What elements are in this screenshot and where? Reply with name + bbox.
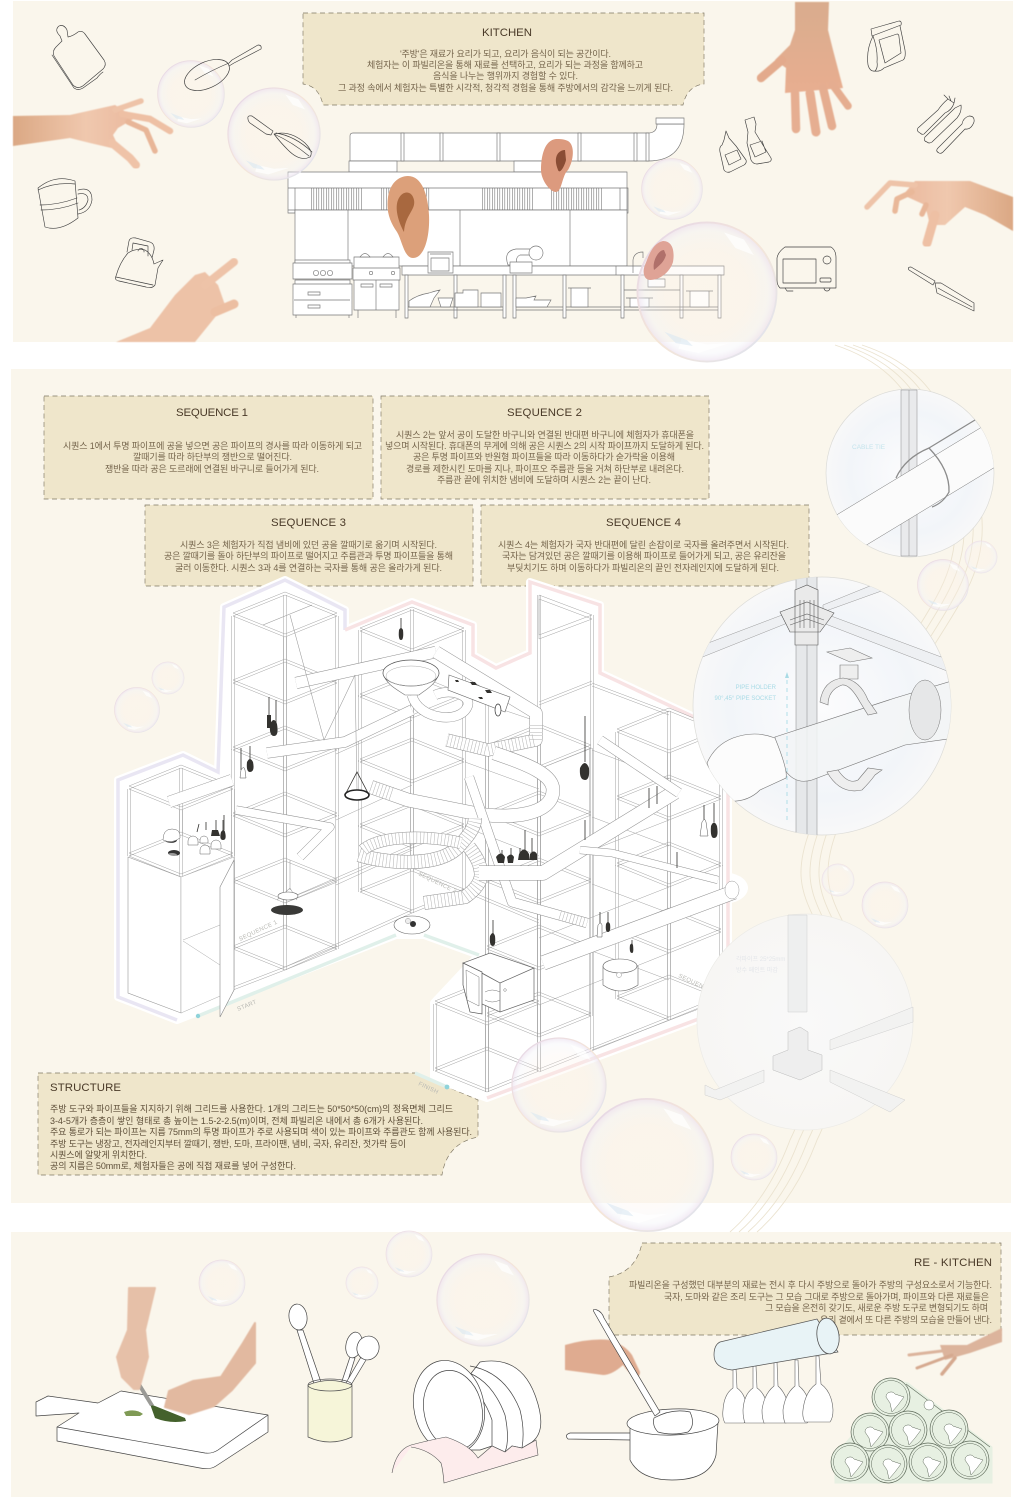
kitchen heading: KITCHEN <box>482 27 532 39</box>
body <box>385 429 704 485</box>
bubbles in sequence panel <box>114 541 997 1231</box>
pot handle <box>566 1433 632 1440</box>
corrugated ring <box>359 818 475 862</box>
heading: RE - KITCHEN <box>914 1257 992 1269</box>
pipe inner rings <box>834 1380 986 1480</box>
board edge <box>57 1415 268 1453</box>
bubbles in re-kitchen panel <box>199 1231 529 1346</box>
body: 시퀀스 2는 앞서 공이 도달한 바구니와 연결된 반대편 바구니에 체험자가 휴대폰을 <box>396 429 694 440</box>
utensil cup <box>287 1303 382 1442</box>
cabinet body <box>128 857 181 1013</box>
cucumber <box>150 1404 186 1422</box>
body: 시퀀스 1에서 투명 파이프에 공을 넣으면 공은 파이프의 경사를 따라 이동하게 되고 <box>63 440 362 451</box>
faucet <box>633 252 643 273</box>
post <box>901 390 917 556</box>
bubble <box>822 864 854 896</box>
panel: kitchen background <box>13 1 1013 342</box>
kitchen body: 그 과정 속에서 체험자는 특별한 시각적, 청각적 경험을 통해 주방에서의 감각을 느끼게 된다. <box>338 82 673 93</box>
body: 주름관 끝에 위치한 냄비에 도달하며 시퀀스 2는 끝이 난다. <box>437 474 651 485</box>
hand: left reach <box>13 101 170 165</box>
pipe <box>837 428 994 545</box>
plates <box>450 1361 541 1452</box>
upper long pipe <box>296 652 436 683</box>
hanging utensils <box>240 618 718 953</box>
ladle handle <box>593 1309 660 1416</box>
frame grid <box>128 592 722 1092</box>
body: 주방 도구와 파이프들을 지지하기 위해 그리드를 사용한다. 1개의 그리드는 50*50*50(cm)의 정육면체 그리드 <box>50 1103 453 1114</box>
pot rim <box>627 1407 719 1437</box>
pot <box>603 959 638 991</box>
hanging glasses <box>723 1356 833 1423</box>
icon: kettle <box>115 238 163 288</box>
icon: microwave <box>777 247 836 288</box>
bubble <box>437 1254 529 1346</box>
cabinet interior <box>181 857 234 1013</box>
diagonal outline <box>906 1384 990 1447</box>
plate lines <box>450 1366 523 1452</box>
socket <box>648 279 665 287</box>
kitchen text card <box>303 13 704 105</box>
lens: base joint <box>697 914 913 1130</box>
body: 시퀀스 3은 체험자가 직접 냄비에 있던 공을 깔때기로 옮기며 시작된다. <box>180 539 437 550</box>
hand: re-kitchen right <box>909 1328 1002 1374</box>
upper arm hand <box>117 1288 155 1389</box>
white silhouette <box>118 580 728 1098</box>
body: 주요 통로가 되는 파이프는 지름 75mm의 투명 파이프가 주로 사용되며 색이 있는 파이프와 주름관도 함께 사용된다. <box>50 1126 472 1137</box>
hand: right reach <box>867 181 1013 243</box>
stove knobs <box>163 815 226 857</box>
holder top <box>820 648 877 715</box>
long bottom right pipe <box>543 892 734 963</box>
pans and pots <box>409 288 713 307</box>
body: 주방 도구는 냉장고, 전자레인지부터 깔때기, 쟁반, 도마, 프라이팬, 냄비, 국자, 유리잔, 젓가락 등이 <box>50 1138 406 1149</box>
range <box>293 260 352 318</box>
body <box>498 539 789 573</box>
sequence 1 label: SEQUENCE 1 <box>238 920 279 943</box>
start label: START <box>237 1000 258 1013</box>
body: 시퀀스에 알맞게 위치한다. <box>50 1149 147 1160</box>
pink rack <box>392 1437 538 1483</box>
pipe end rim <box>725 881 739 899</box>
body: 쟁반을 따라 공은 도르래에 연결된 바구니로 들어가게 된다. <box>105 463 319 474</box>
spoon left <box>287 1303 323 1390</box>
faint labels: 각파이프 25*25mm <box>736 955 785 963</box>
sequence 3 label: SEQUENCE 3 <box>677 973 718 997</box>
beams <box>705 1007 913 1112</box>
kitchen body: 체험자는 이 파빌리온을 통해 재료를 선택하고, 요리가 되는 과정을 함께하고 <box>367 60 643 70</box>
icon: bottles <box>720 117 771 172</box>
green backing <box>835 1380 992 1483</box>
tube <box>714 1319 838 1370</box>
corrugated ring back <box>363 838 461 850</box>
heading: SEQUENCE 3 <box>271 517 346 529</box>
lavender outline <box>118 580 345 1020</box>
post <box>796 570 817 840</box>
isometric pavilion drawing <box>118 580 748 1098</box>
bubble <box>228 88 320 180</box>
body: 국자, 도마와 같은 조리 도구는 그 모습 그대로 주방으로 돌아가며, 파이프와 다른 재료들은 <box>664 1291 989 1302</box>
tube end <box>815 1317 841 1355</box>
re-kitchen text card <box>609 1243 1001 1335</box>
spoons right <box>339 1331 382 1390</box>
bubble <box>152 662 184 694</box>
funnel <box>383 660 439 695</box>
kitchen line drawing <box>288 118 724 318</box>
finish dot <box>445 1085 449 1089</box>
body: 부딪치기도 하며 이동하다가 파빌리온의 끝인 전자레인지에 도달하게 된다. <box>507 562 779 573</box>
cable tie <box>896 420 975 507</box>
duct detail <box>349 118 684 172</box>
left lower pipe <box>236 810 330 857</box>
heading: SEQUENCE 2 <box>507 407 582 419</box>
right back pipe <box>600 740 679 793</box>
glass rack <box>714 1317 841 1423</box>
counter tables <box>402 266 724 318</box>
sequence 3 card <box>145 505 473 586</box>
heading: STRUCTURE <box>50 1082 121 1094</box>
upper mid pipe <box>267 710 412 753</box>
holder bottom <box>827 768 882 791</box>
hood <box>288 172 628 213</box>
upper diagonal pipe <box>436 652 536 750</box>
plate rack <box>392 1354 541 1483</box>
mixer <box>507 246 543 273</box>
bubble <box>114 687 160 733</box>
bubble <box>862 882 908 928</box>
holder labels: PIPE HOLDER <box>736 685 777 691</box>
kitchen body: 음식을 나누는 행위까지 경험할 수 있다. <box>433 70 578 81</box>
knife <box>137 1384 154 1406</box>
connector <box>773 1027 822 1080</box>
finish label: FINISH <box>417 1081 439 1096</box>
back wall <box>295 210 627 266</box>
body <box>629 1279 992 1325</box>
bubble <box>918 560 968 610</box>
right mid pipe <box>580 850 718 880</box>
pipe end bulge <box>696 872 748 904</box>
white elbow pipe <box>707 734 786 801</box>
pot body <box>630 1422 718 1480</box>
body: 그 모습을 온전히 갖기도, 새로운 주방 도구로 변형되기도 하며 <box>765 1302 988 1313</box>
kitchen body <box>338 49 673 93</box>
teal route <box>198 935 479 1087</box>
bubbles in kitchen panel <box>158 61 777 362</box>
stacked pipes <box>831 1378 992 1483</box>
blue arrow <box>786 680 788 820</box>
body: 국자는 담겨있던 공은 깔때기를 이용해 파이프로 들어가게 되고, 공은 유리잔을 <box>502 550 786 561</box>
bubble <box>346 1267 378 1299</box>
ear: left <box>387 176 429 258</box>
right arm hand <box>165 1323 255 1414</box>
bubble <box>642 159 702 219</box>
cutting board with hands <box>36 1288 268 1469</box>
fryer <box>353 254 400 318</box>
ladle bowl <box>654 1411 693 1434</box>
body: 굴러 이동한다. 시퀀스 3과 4를 연결하는 국자를 통해 공은 올라가게 된다. <box>175 562 442 573</box>
hanging basket upper <box>345 772 369 800</box>
big spiral <box>371 753 553 816</box>
post <box>788 915 807 1012</box>
icon: mug <box>38 179 92 228</box>
cutting board mechanism <box>448 675 510 716</box>
cable tie label: CABLE TIE <box>852 444 886 451</box>
cabinet <box>128 857 234 1017</box>
pipe socket ellipse <box>909 680 941 740</box>
hand: top hanging <box>761 2 848 132</box>
corrugated lower <box>424 847 481 903</box>
microwave icon details <box>785 256 831 291</box>
plate center <box>416 1365 490 1455</box>
lens: cable tie <box>826 388 994 558</box>
cup <box>308 1380 352 1442</box>
hood grills <box>311 188 603 210</box>
pink outline <box>345 582 728 1098</box>
body: 공은 투명 파이프와 반원형 파이프들을 따라 이동하다가 숟가락을 이용해 <box>413 451 675 462</box>
front plate <box>405 1354 493 1460</box>
bubble <box>731 1134 777 1180</box>
icon: frying pan <box>180 45 261 97</box>
panel: sequence background <box>11 369 1011 1203</box>
sequence 2 card <box>381 396 709 499</box>
heading: SEQUENCE 1 <box>176 407 248 419</box>
body: 우리 곁에서 또 다른 주방의 모습을 만들어 낸다. <box>820 1315 992 1325</box>
pulley ropes <box>263 605 357 790</box>
sequence 2 label: SEQUENCE 2 <box>417 871 458 895</box>
pan with balls <box>394 916 430 934</box>
lens: pipe holder <box>693 570 960 840</box>
bubble <box>158 61 224 127</box>
body <box>63 440 362 474</box>
icon: bag <box>868 21 905 71</box>
bubble <box>199 1260 245 1306</box>
body: 깔때기를 따라 하단부의 쟁반으로 떨어진다. <box>133 451 292 462</box>
microwave <box>463 953 534 1014</box>
body <box>50 1103 472 1171</box>
central utensil rack <box>496 830 537 863</box>
body: 공의 지름은 50mm로, 체험자들은 공에 직접 재료를 넣어 구성한다. <box>50 1160 296 1171</box>
icon: cutting board <box>52 26 105 90</box>
bubble <box>512 1038 606 1132</box>
faint labels: 방수 페인트 마감 <box>736 966 778 974</box>
transparent pipe <box>775 680 955 781</box>
structure card <box>38 1073 478 1175</box>
small microwave <box>428 252 453 273</box>
holder labels <box>714 685 777 702</box>
cabinet pipe <box>169 780 232 802</box>
right rising pipe <box>479 792 675 873</box>
cucumber slice <box>124 1410 143 1416</box>
body: 시퀀스 4는 체험자가 국자 반대편에 달린 손잡이로 국자를 올려주면서 시작된다. <box>498 539 789 550</box>
icon: cutlery <box>917 95 974 153</box>
icon: whisk <box>248 116 312 158</box>
faint labels <box>736 955 785 974</box>
pipes <box>169 652 739 963</box>
grid rails <box>702 586 946 671</box>
arrow head <box>785 672 789 678</box>
funnel loop <box>412 692 468 717</box>
hand: pointing <box>116 262 234 342</box>
ear: right <box>644 241 674 280</box>
sequence 4 card <box>481 505 809 586</box>
body: 경로를 제한시킨 도마를 지나, 파이프오 주름관 등을 거쳐 하단부로 내려온다. <box>406 463 684 474</box>
bubble <box>965 541 997 573</box>
pot with ladle and hand <box>565 1309 719 1480</box>
sequence 4 label: SEQUENCE 4 <box>697 1010 738 1033</box>
exhaust duct <box>350 124 684 161</box>
pipe circles <box>831 1378 989 1483</box>
bubble <box>637 222 777 362</box>
cup rim <box>308 1379 352 1391</box>
body: 3-4-5개가 층층이 쌓인 형태로 총 높이는 1.5-2-2.5(m)이며, 전체 파빌리온 내에서 총 6개가 사용된다. <box>50 1115 423 1126</box>
ball shapes <box>845 1392 983 1479</box>
open door <box>220 860 234 1017</box>
body: 공은 깔때기를 돌아 하단부의 파이프로 떨어지고 주름관과 투명 파이프들을 통해 <box>164 550 453 561</box>
kitchen body: '주방'은 재료가 요리가 되고, 요리가 음식이 되는 공간이다. <box>400 49 611 59</box>
panel: re-kitchen background <box>11 1232 1011 1497</box>
holder labels: 90°,45° PIPE SOCKET <box>714 696 776 702</box>
stirring hand <box>565 1340 640 1377</box>
icon: knife <box>908 267 974 311</box>
start dot <box>196 1014 200 1018</box>
straight drop pipe <box>469 777 587 923</box>
tray and basket lower <box>271 860 303 915</box>
bubble <box>581 1099 713 1231</box>
ear: center <box>541 139 573 192</box>
sequence 1 card <box>44 396 373 499</box>
bubble <box>386 1231 432 1277</box>
body: 파빌리온을 구성했던 대부분의 재료는 전시 후 다시 주방으로 돌아가 주방의 구성요소로서 기능한다. <box>629 1279 992 1290</box>
board <box>36 1391 268 1469</box>
body: 넣으며 시작된다. 휴대폰의 무게에 의해 공은 시퀀스 2의 시작 파이프까지 도달하게 된다. <box>385 440 704 451</box>
connector <box>780 585 834 645</box>
heading: SEQUENCE 4 <box>606 517 681 529</box>
body <box>164 539 453 573</box>
